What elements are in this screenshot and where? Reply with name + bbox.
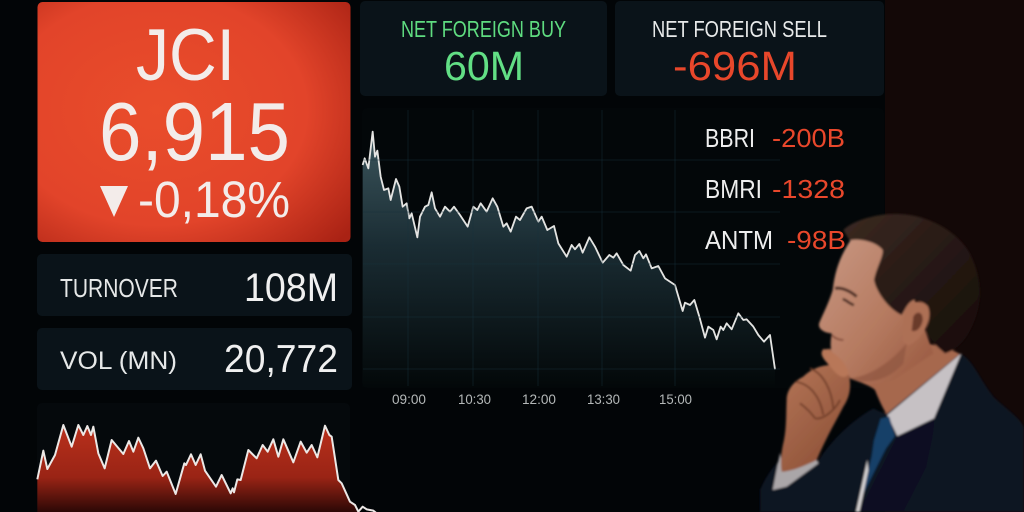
JCI value: 6,915 (99, 85, 290, 178)
jaw shadow (850, 343, 907, 381)
knuckle on chin (822, 349, 849, 377)
time axis labels: 09:00 (392, 391, 426, 407)
time axis labels (392, 391, 692, 407)
volume value: 20,772 (224, 338, 338, 381)
ear (903, 302, 929, 346)
time axis labels: 12:00 (522, 391, 556, 407)
lapel (859, 420, 934, 512)
JCI change: -0,18% (138, 171, 290, 228)
line chart (363, 132, 775, 387)
panel: volume (37, 328, 352, 390)
BMRI row: BMRI (705, 174, 762, 204)
time axis labels: 15:00 (659, 391, 692, 407)
mouth (832, 335, 843, 340)
neck (850, 340, 960, 414)
down triangle icon (100, 186, 128, 217)
buy label: NET FOREIGN BUY (401, 16, 566, 42)
turnover label: TURNOVER (60, 273, 178, 303)
BMRI row (705, 174, 845, 204)
panel: JCI index (38, 2, 350, 242)
finger shading (795, 368, 840, 419)
BMRI row: -1328 (772, 174, 845, 204)
shirt front (856, 460, 868, 512)
BBRI row: BBRI (705, 123, 755, 153)
sell label: NET FOREIGN SELL (652, 16, 827, 42)
suit (760, 353, 1024, 512)
ANTM row: ANTM (705, 225, 773, 255)
stock list (705, 123, 846, 255)
person in profile (760, 214, 1024, 512)
BBRI row (705, 123, 845, 153)
buy value: 60M (444, 43, 524, 89)
panel: small red chart (37, 403, 377, 512)
panel: main chart (362, 108, 884, 407)
time axis labels: 13:30 (587, 391, 620, 407)
ANTM row (705, 225, 846, 255)
time axis labels: 10:30 (458, 391, 491, 407)
JCI label: JCI (136, 15, 235, 96)
turnover value: 108M (244, 266, 338, 310)
hair (843, 214, 980, 353)
panel: net foreign buy (360, 1, 607, 96)
face (819, 239, 933, 384)
eye and brow (835, 288, 857, 305)
panel: net foreign sell (615, 1, 884, 96)
shirt collar (887, 353, 961, 436)
tie (862, 417, 895, 497)
BBRI row: -200B (772, 123, 845, 153)
red area chart (37, 425, 377, 512)
forearm and hand (781, 349, 850, 472)
volume label: VOL (MN) (60, 347, 177, 375)
ANTM row: -98B (787, 225, 846, 255)
panel: turnover (37, 254, 352, 316)
cuff (773, 453, 818, 490)
sell value: -696M (673, 43, 797, 89)
